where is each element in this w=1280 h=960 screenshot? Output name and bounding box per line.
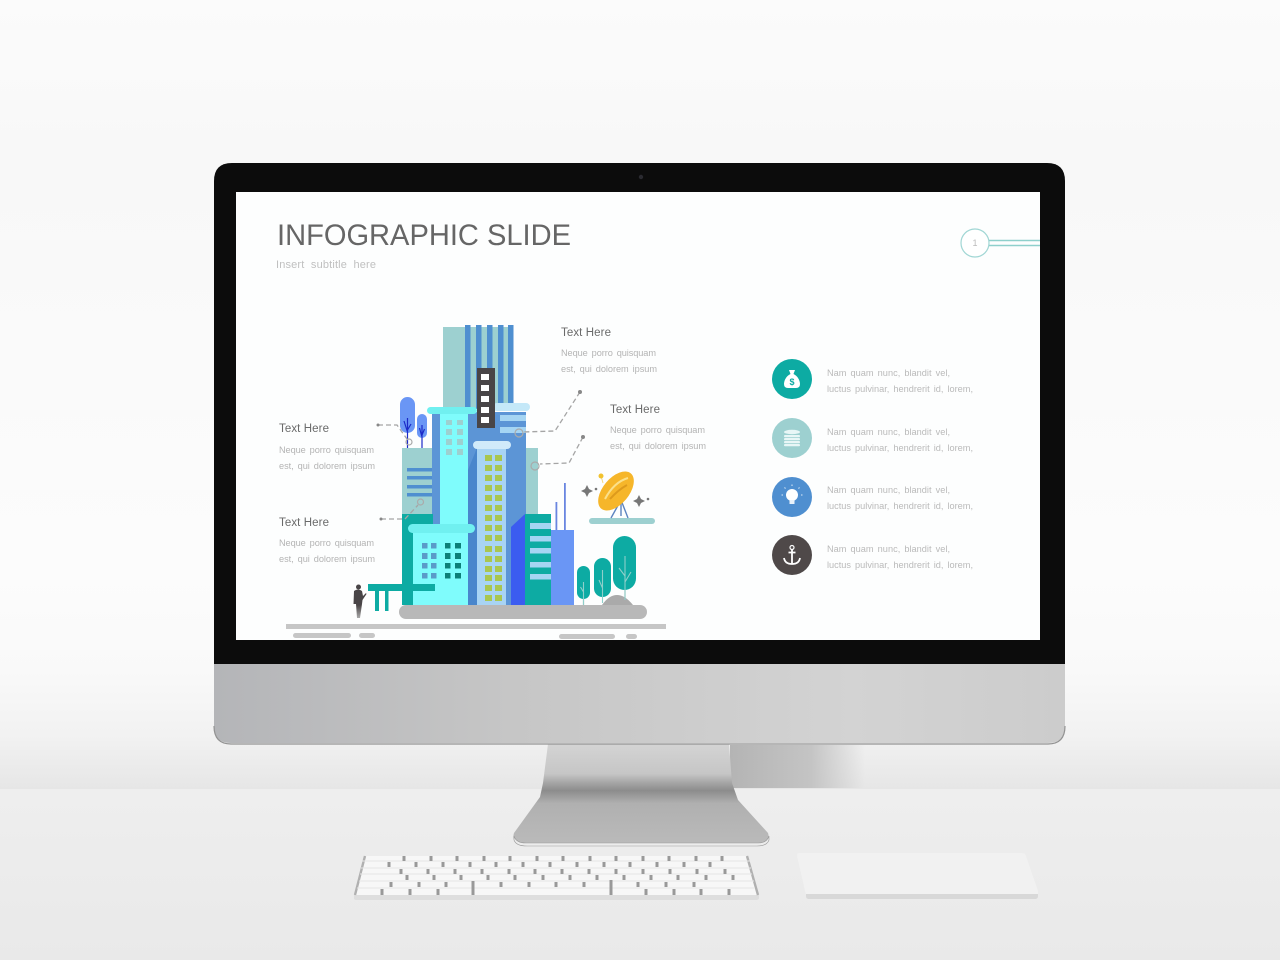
list item: money bag	[772, 359, 973, 399]
text block lower left: est, qui dolorem ipsum	[279, 554, 375, 564]
page number badge: 1	[972, 238, 978, 248]
callout connector upper left	[376, 424, 412, 445]
list item: light bulb	[772, 477, 973, 517]
light teal side blocks	[402, 448, 538, 514]
teal building with stripes	[525, 514, 551, 605]
text block upper left: Neque porro quisquam	[279, 445, 374, 455]
list item: money bag: luctus pulvinar, hendrerit id, lorem,	[827, 384, 973, 394]
list item: anchor: luctus pulvinar, hendrerit id, lorem,	[827, 560, 973, 570]
dark window column	[477, 368, 495, 428]
page number badge	[961, 229, 1040, 257]
text block lower left: Neque porro quisquam	[279, 538, 374, 548]
monitor stand	[513, 744, 769, 846]
list item: money bag: Nam quam nunc, blandit vel,	[827, 368, 950, 378]
monitor body	[214, 163, 1065, 744]
text block middle right: Text Here	[610, 404, 660, 416]
text block upper left: Text Here	[279, 423, 329, 435]
list item: coin stack: Nam quam nunc, blandit vel,	[827, 427, 950, 437]
keyboard	[354, 856, 759, 900]
title: INFOGRAPHIC SLIDE	[277, 219, 571, 252]
center pale tower with green windows	[473, 441, 511, 605]
text block middle right: Neque porro quisquam	[610, 425, 705, 435]
text block top right: Neque porro quisquam	[561, 348, 656, 358]
list item: coin stack: luctus pulvinar, hendrerit id, lorem,	[827, 443, 973, 453]
periwinkle building with antennas	[551, 483, 574, 605]
list item: anchor: Nam quam nunc, blandit vel,	[827, 544, 950, 554]
icon: person	[354, 584, 366, 618]
blue trees on roof	[400, 397, 427, 448]
trackpad	[797, 853, 1038, 899]
callout connector top right	[515, 390, 582, 437]
left block stripes	[407, 468, 433, 496]
text block upper left	[279, 423, 375, 471]
text block middle right: est, qui dolorem ipsum	[610, 441, 706, 451]
icon: satellite dish	[589, 465, 655, 524]
icon: sparkles	[581, 485, 649, 507]
text block lower left: Text Here	[279, 517, 329, 529]
ground line and dashes	[286, 624, 666, 639]
slide screen	[236, 192, 1040, 640]
text block top right: Text Here	[561, 327, 611, 339]
teal trees on the right	[577, 536, 636, 605]
text block lower left	[279, 517, 375, 564]
text block top right: est, qui dolorem ipsum	[561, 364, 657, 374]
list item: light bulb: Nam quam nunc, blandit vel,	[827, 485, 950, 495]
grey base	[399, 605, 647, 619]
subtitle: Insert subtitle here	[276, 259, 376, 271]
illustration: city buildings	[286, 325, 666, 639]
text block upper left: est, qui dolorem ipsum	[279, 461, 375, 471]
central blue building	[432, 403, 530, 605]
text block top right	[561, 327, 657, 374]
lower left teal building	[402, 514, 475, 605]
list item: coin stack	[772, 418, 973, 458]
teal platform bench	[368, 584, 435, 611]
list item: light bulb: luctus pulvinar, hendrerit id, lorem,	[827, 501, 973, 511]
bright blue wedge	[511, 514, 525, 605]
list item: anchor	[772, 535, 973, 575]
callout connector lower left	[380, 499, 424, 520]
callout connector middle right	[531, 435, 585, 470]
cyan tower	[427, 407, 477, 530]
text block middle right	[610, 404, 706, 451]
top tower	[443, 325, 514, 409]
list item: money bag: $	[789, 377, 795, 387]
